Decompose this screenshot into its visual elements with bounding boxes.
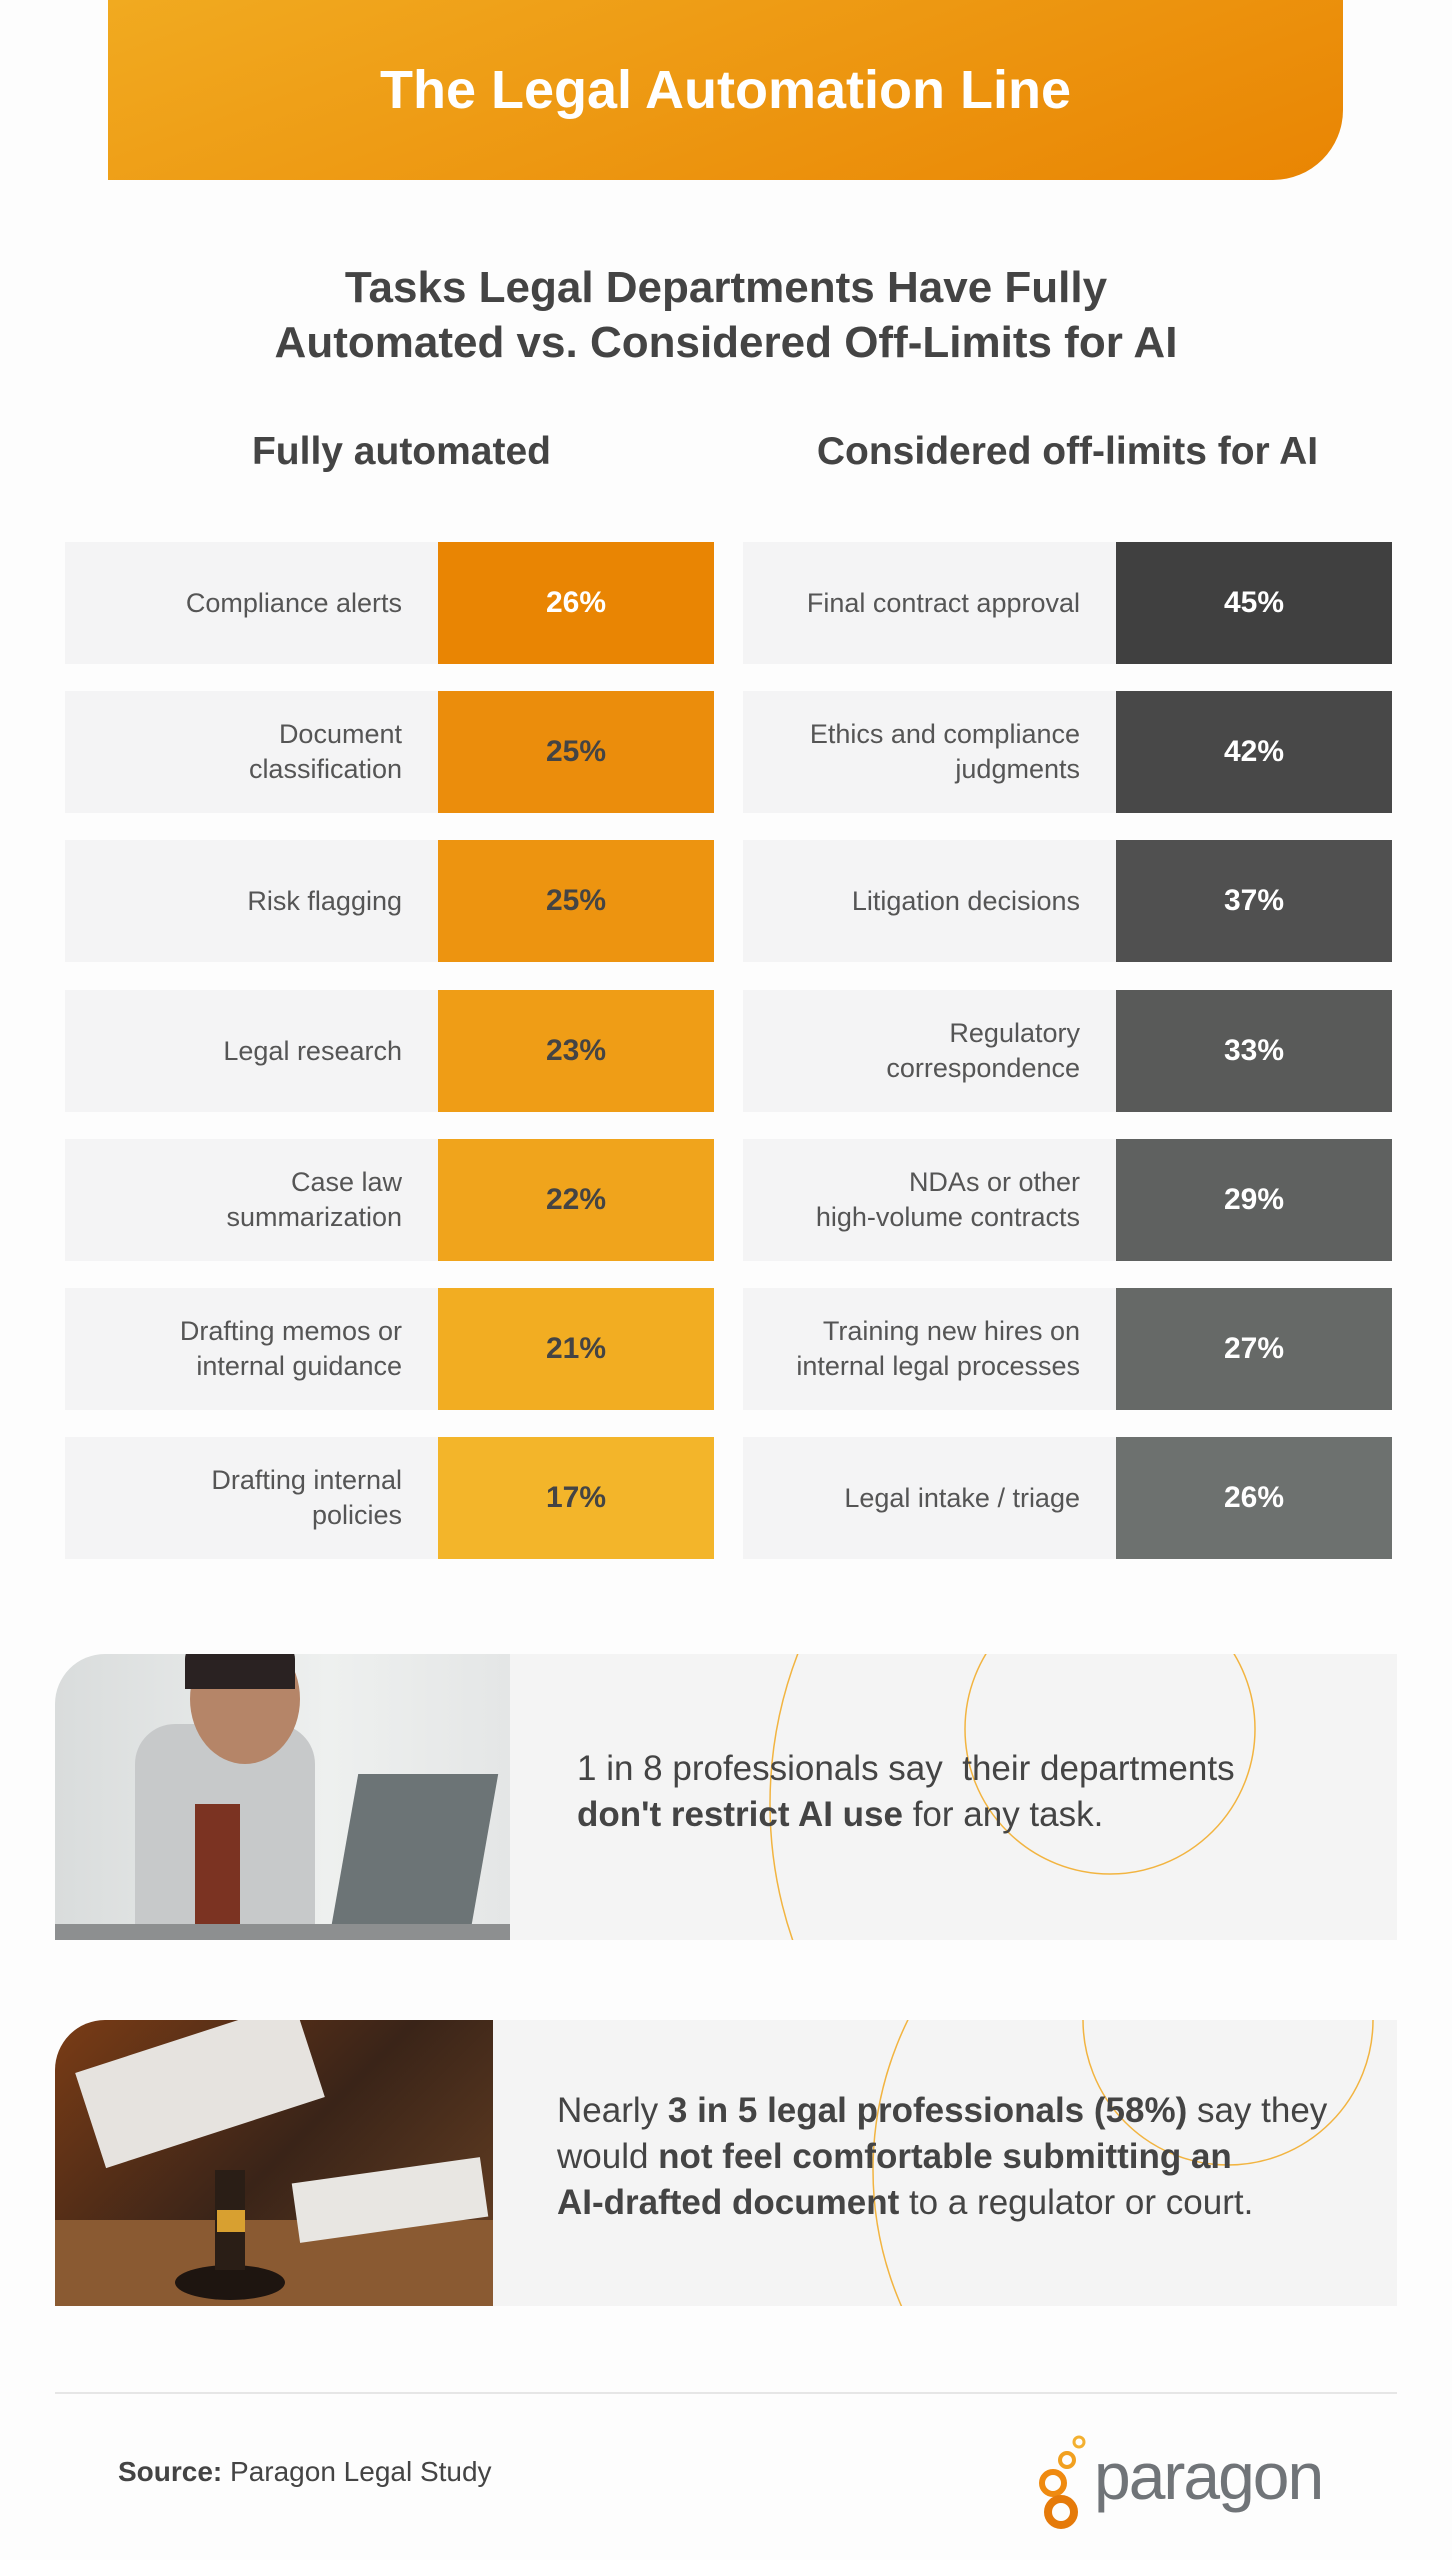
- callout: 3 in 5: [55, 2020, 1397, 2306]
- subtitle: [275, 263, 1177, 367]
- panel: off-limits rows: 33%: [1224, 1034, 1284, 1067]
- panel: fully automated rows: Legal research: [223, 1036, 402, 1066]
- panel: fully automated rows: Compliance alerts: [186, 588, 402, 618]
- panel: off-limits rows: Regulatory: [949, 1018, 1080, 1048]
- logo: paragon: [1039, 2436, 1322, 2529]
- panel: off-limits rows: 42%: [1224, 735, 1284, 768]
- source: Source: Paragon Legal Study: [118, 2456, 492, 2487]
- panel: off-limits rows: high-volume contracts: [816, 1202, 1080, 1232]
- callout: 1 in 8: [55, 1654, 1397, 1940]
- panel: fully automated rows: policies: [312, 1500, 402, 1530]
- panel: fully automated rows: classification: [249, 754, 402, 784]
- panel: fully automated rows: summarization: [226, 1202, 402, 1232]
- photo: woman at laptop: [55, 1654, 510, 1940]
- panel: fully automated rows: Drafting internal: [211, 1465, 402, 1495]
- panel: fully automated rows: Risk flagging: [247, 886, 402, 916]
- panel: off-limits rows: Final contract approval: [807, 588, 1080, 618]
- title banner: The Legal Automation Line: [380, 60, 1071, 120]
- panel: off-limits rows: Training new hires on: [823, 1316, 1080, 1346]
- panel: off-limits rows: Legal intake / triage: [844, 1482, 1080, 1512]
- panel: fully automated rows: 25%: [546, 735, 606, 768]
- photo: gavel and documents: [55, 2020, 493, 2306]
- panel: fully automated rows: 17%: [546, 1481, 606, 1514]
- column header: off-limits: Considered off-limits for AI: [817, 430, 1318, 473]
- panel: off-limits rows: 37%: [1224, 884, 1284, 917]
- panel: fully automated rows: Case law: [291, 1167, 402, 1197]
- text panel: Nearly 3 in 5 legal professionals (58%) say they: [557, 2091, 1327, 2130]
- text panel: 1 in 8 professionals say their departments: [577, 1749, 1235, 1788]
- panel: fully automated rows: Drafting memos or: [180, 1316, 402, 1346]
- subtitle: Tasks Legal Departments Have Fully: [345, 263, 1107, 312]
- text panel: would not feel comfortable submitting an: [557, 2137, 1232, 2176]
- column header: fully automated: Fully automated: [252, 430, 551, 473]
- panel: off-limits rows: Litigation decisions: [852, 886, 1080, 916]
- panel: off-limits rows: correspondence: [886, 1053, 1080, 1083]
- panel: fully automated rows: 21%: [546, 1332, 606, 1365]
- panel: fully automated rows: Document: [279, 719, 402, 749]
- panel: fully automated rows: internal guidance: [196, 1351, 402, 1381]
- panel: fully automated rows: 25%: [546, 884, 606, 917]
- panel: off-limits rows: judgments: [955, 754, 1080, 784]
- panel: off-limits rows: 27%: [1224, 1332, 1284, 1365]
- logo: paragon: paragon: [1094, 2439, 1322, 2513]
- panel: off-limits rows: internal legal processes: [796, 1351, 1080, 1381]
- panel: fully automated rows: 23%: [546, 1034, 606, 1067]
- subtitle: Automated vs. Considered Off-Limits for AI: [275, 318, 1177, 367]
- panel: fully automated rows: [65, 542, 714, 1559]
- text panel: don't restrict AI use for any task.: [577, 1795, 1103, 1834]
- panel: off-limits rows: 26%: [1224, 1481, 1284, 1514]
- text panel: AI-drafted document to a regulator or court.: [557, 2183, 1253, 2222]
- panel: fully automated rows: 26%: [546, 586, 606, 619]
- text panel: [510, 1654, 1397, 1940]
- panel: off-limits rows: NDAs or other: [909, 1167, 1080, 1197]
- panel: off-limits rows: 29%: [1224, 1183, 1284, 1216]
- panel: off-limits rows: [743, 542, 1392, 1559]
- panel: off-limits rows: Ethics and compliance: [810, 719, 1080, 749]
- panel: fully automated rows: 22%: [546, 1183, 606, 1216]
- text panel: [493, 2020, 1397, 2306]
- panel: off-limits rows: 45%: [1224, 586, 1284, 619]
- title banner: [108, 0, 1343, 180]
